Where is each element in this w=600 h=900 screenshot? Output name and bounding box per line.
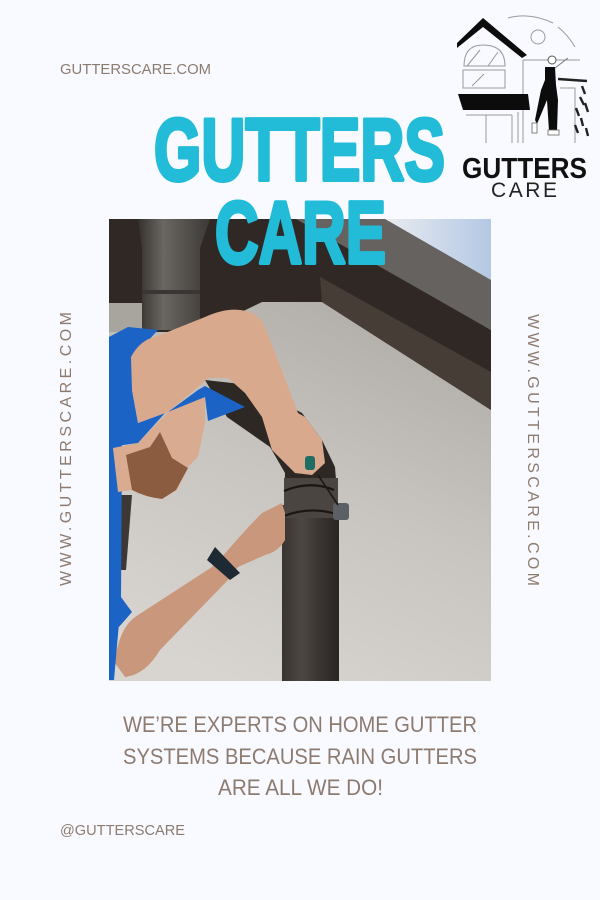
beard	[126, 432, 188, 499]
downpipe elbow	[205, 380, 336, 478]
title: CARE	[215, 183, 386, 282]
logo	[457, 16, 588, 202]
photo: worker fitting a downpipe	[109, 219, 491, 681]
grey fascia	[296, 219, 491, 330]
tagline: SYSTEMS BECAUSE RAIN GUTTERS	[123, 744, 477, 769]
social handle: @GUTTERSCARE	[60, 823, 185, 839]
left vertical website label: WWW.GUTTERSCARE.COM	[58, 312, 75, 586]
window strip left of the worker	[109, 303, 142, 332]
watch	[207, 547, 240, 580]
sky	[385, 219, 491, 280]
logo awning	[458, 94, 530, 110]
cap	[168, 386, 245, 421]
shirt	[109, 327, 165, 447]
right vertical website label: WWW.GUTTERSCARE.COM	[524, 314, 541, 586]
wall	[109, 219, 491, 681]
screwdriver handle	[305, 456, 315, 470]
logo worker	[532, 56, 568, 135]
logo leaves	[558, 79, 588, 136]
top website label: GUTTERSCARE.COM	[60, 62, 211, 78]
logo wordmark: GUTTERS	[462, 153, 587, 185]
title: GUTTERS	[154, 100, 445, 199]
title	[154, 100, 445, 282]
logo house lines	[463, 16, 580, 143]
raised arm and hand	[131, 310, 325, 475]
logo house roof	[457, 18, 527, 58]
logo: CARE	[491, 179, 557, 202]
upper downspout	[138, 219, 210, 330]
face and neck	[113, 397, 205, 499]
brown fascia band	[320, 277, 491, 410]
downpipe	[282, 505, 339, 681]
tagline: WE’RE EXPERTS ON HOME GUTTER	[123, 712, 477, 737]
forearm and hand on pipe	[115, 503, 285, 677]
post behind the worker	[120, 495, 132, 570]
shirt column and sleeve	[109, 445, 122, 680]
tagline	[123, 712, 477, 800]
tagline: ARE ALL WE DO!	[218, 775, 383, 800]
pipe collar and clamp	[284, 475, 349, 520]
roof eaves	[109, 219, 491, 410]
